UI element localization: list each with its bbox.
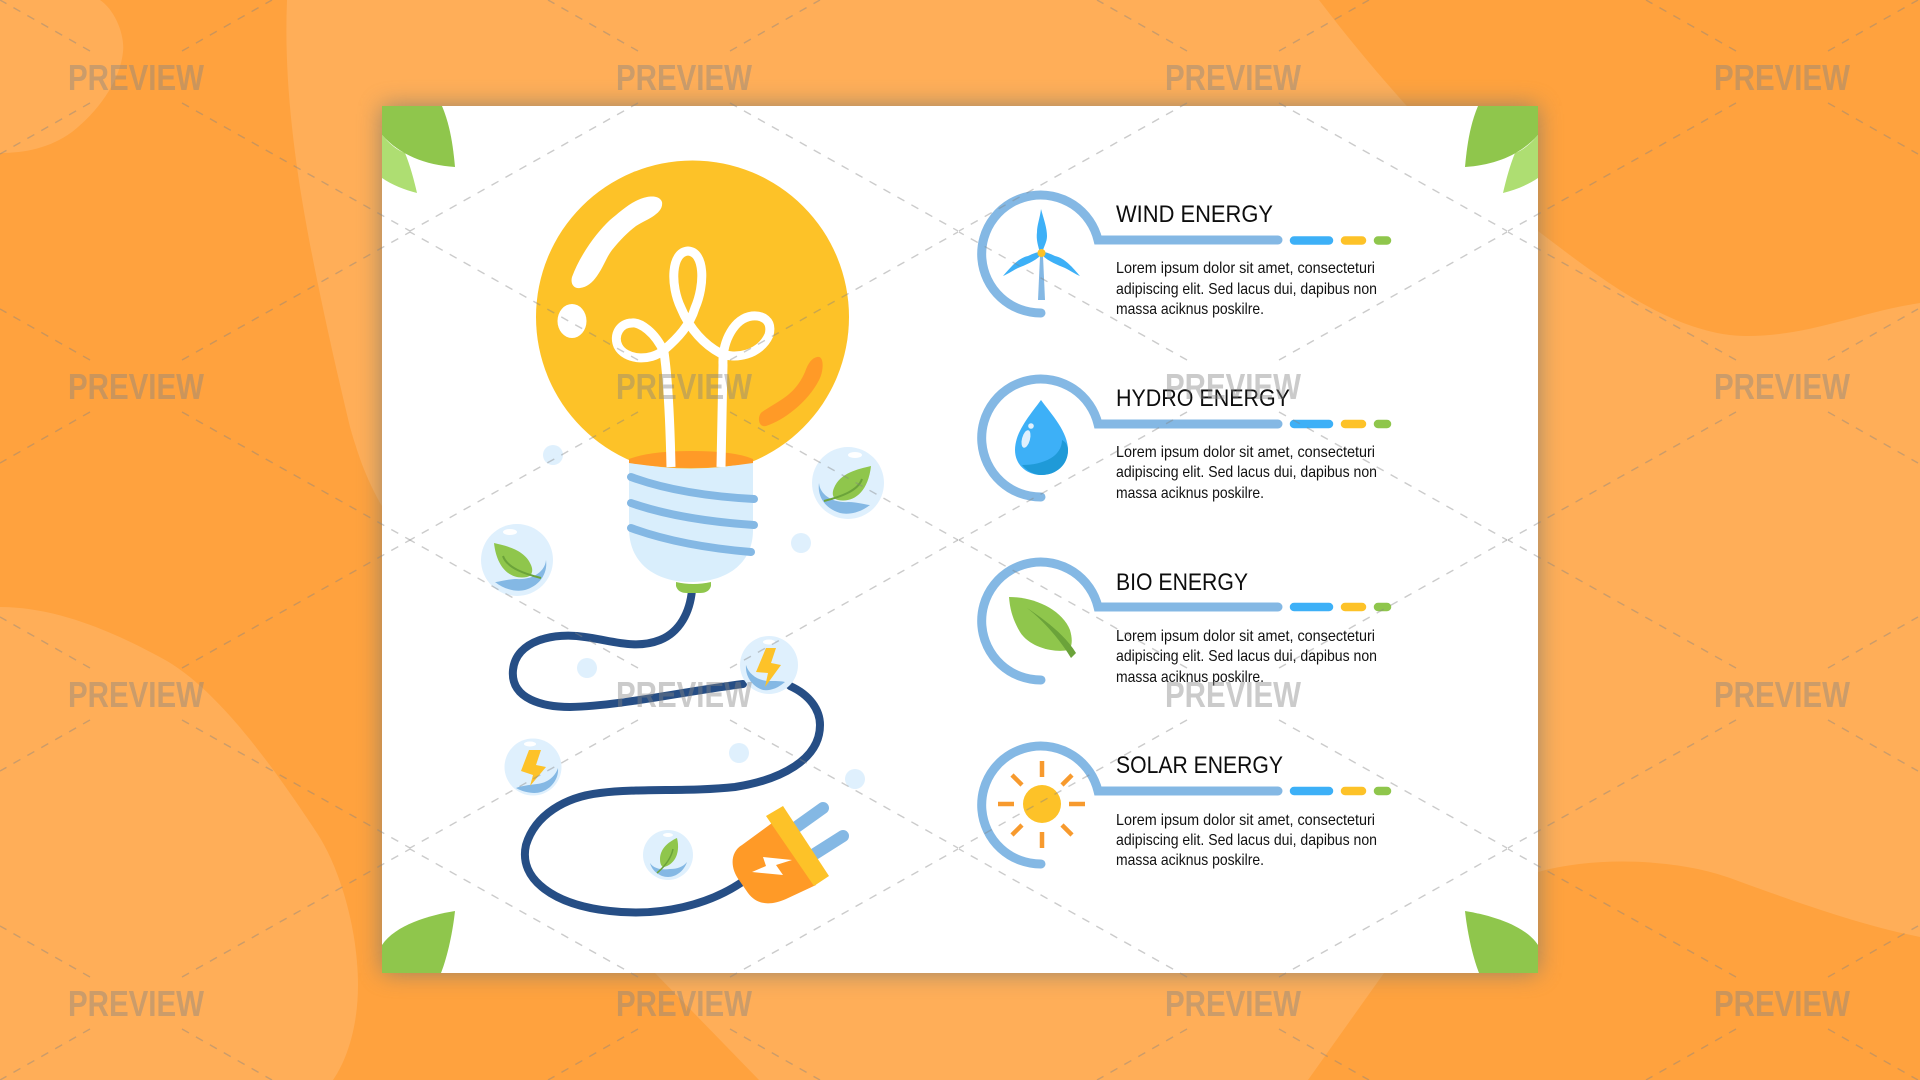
icon: wind turbine — [1003, 209, 1080, 300]
watermark text: PREVIEW — [68, 366, 204, 407]
watermark text: PREVIEW — [68, 674, 204, 715]
plug prongs — [795, 808, 843, 855]
heading: SOLAR ENERGY — [1116, 752, 1283, 779]
watermark text: PREVIEW — [616, 366, 752, 407]
icon: leaf — [1009, 597, 1076, 658]
bottom contact — [676, 582, 711, 593]
bulb glass — [536, 160, 849, 474]
watermark text: PREVIEW — [68, 57, 204, 98]
corner leaf: top left — [382, 106, 455, 193]
glass base glow — [629, 451, 753, 468]
energy item: wind — [982, 195, 1387, 318]
screw threads — [631, 477, 754, 552]
description: adipiscing elit. Sed lacus dui, dapibus non — [1116, 832, 1377, 849]
description: massa aciknus poskilre. — [1116, 669, 1264, 686]
icon: sun — [998, 761, 1085, 848]
panel shadow — [382, 106, 1538, 973]
watermark text: PREVIEW — [68, 983, 204, 1024]
watermark text: PREVIEW — [1165, 983, 1301, 1024]
watermark text: PREVIEW — [616, 983, 752, 1024]
panel — [382, 106, 1538, 973]
ring and divider — [982, 746, 1278, 864]
watermark text: PREVIEW — [1714, 983, 1850, 1024]
bolt bubble: on cord — [740, 636, 798, 694]
power cord — [513, 590, 820, 913]
bolt bubble: left of cord — [504, 738, 562, 796]
corner leaf: top right — [1465, 106, 1538, 193]
watermark text: PREVIEW — [1714, 57, 1850, 98]
watermark text: PREVIEW — [1165, 366, 1301, 407]
small floating dots — [543, 445, 865, 789]
watermark text: PREVIEW — [1165, 57, 1301, 98]
description: Lorem ipsum dolor sit amet, consecteturi — [1116, 812, 1375, 829]
light bulb — [536, 160, 849, 593]
plug body — [733, 823, 816, 903]
energy item: hydro — [982, 379, 1387, 502]
bulb screw base — [629, 462, 753, 582]
corner leaf: bottom left — [382, 911, 455, 973]
description: massa aciknus poskilre. — [1116, 485, 1264, 502]
watermark text: PREVIEW — [616, 57, 752, 98]
icon: water drop — [1015, 400, 1068, 475]
description: Lorem ipsum dolor sit amet, consecteturi — [1116, 260, 1375, 277]
leaf bubble: left — [481, 524, 553, 596]
energy item: bio — [982, 562, 1387, 686]
ring and divider — [982, 562, 1278, 680]
leaf bubble: small — [643, 830, 693, 880]
heading: HYDRO ENERGY — [1116, 385, 1290, 412]
description: Lorem ipsum dolor sit amet, consecteturi — [1116, 444, 1375, 461]
glass highlight — [572, 197, 662, 288]
filament — [616, 251, 770, 467]
description: adipiscing elit. Sed lacus dui, dapibus non — [1116, 648, 1377, 665]
description: massa aciknus poskilre. — [1116, 301, 1264, 318]
heading: WIND ENERGY — [1116, 201, 1273, 228]
energy item: solar — [982, 746, 1387, 869]
watermark text: PREVIEW — [1714, 674, 1850, 715]
glass reflection — [759, 357, 823, 426]
ring and divider — [982, 379, 1278, 497]
corner leaf: bottom right — [1465, 911, 1538, 973]
watermark text: PREVIEW — [616, 674, 752, 715]
glass highlight dot — [558, 304, 586, 338]
description: Lorem ipsum dolor sit amet, consecteturi — [1116, 628, 1375, 645]
watermark text: PREVIEW — [1714, 366, 1850, 407]
plug collar — [766, 806, 829, 886]
accent dashes — [1294, 236, 1387, 245]
accent dashes — [1294, 420, 1387, 428]
plug bolt — [752, 857, 792, 875]
heading: BIO ENERGY — [1116, 569, 1248, 596]
description: adipiscing elit. Sed lacus dui, dapibus non — [1116, 464, 1377, 481]
accent dashes — [1294, 787, 1387, 795]
plug — [733, 806, 843, 903]
accent dashes — [1294, 603, 1387, 611]
description: massa aciknus poskilre. — [1116, 852, 1264, 869]
watermark text: PREVIEW — [1165, 674, 1301, 715]
leaf bubble: upper right — [812, 447, 884, 519]
description: adipiscing elit. Sed lacus dui, dapibus non — [1116, 281, 1377, 298]
ring and divider — [982, 195, 1278, 313]
